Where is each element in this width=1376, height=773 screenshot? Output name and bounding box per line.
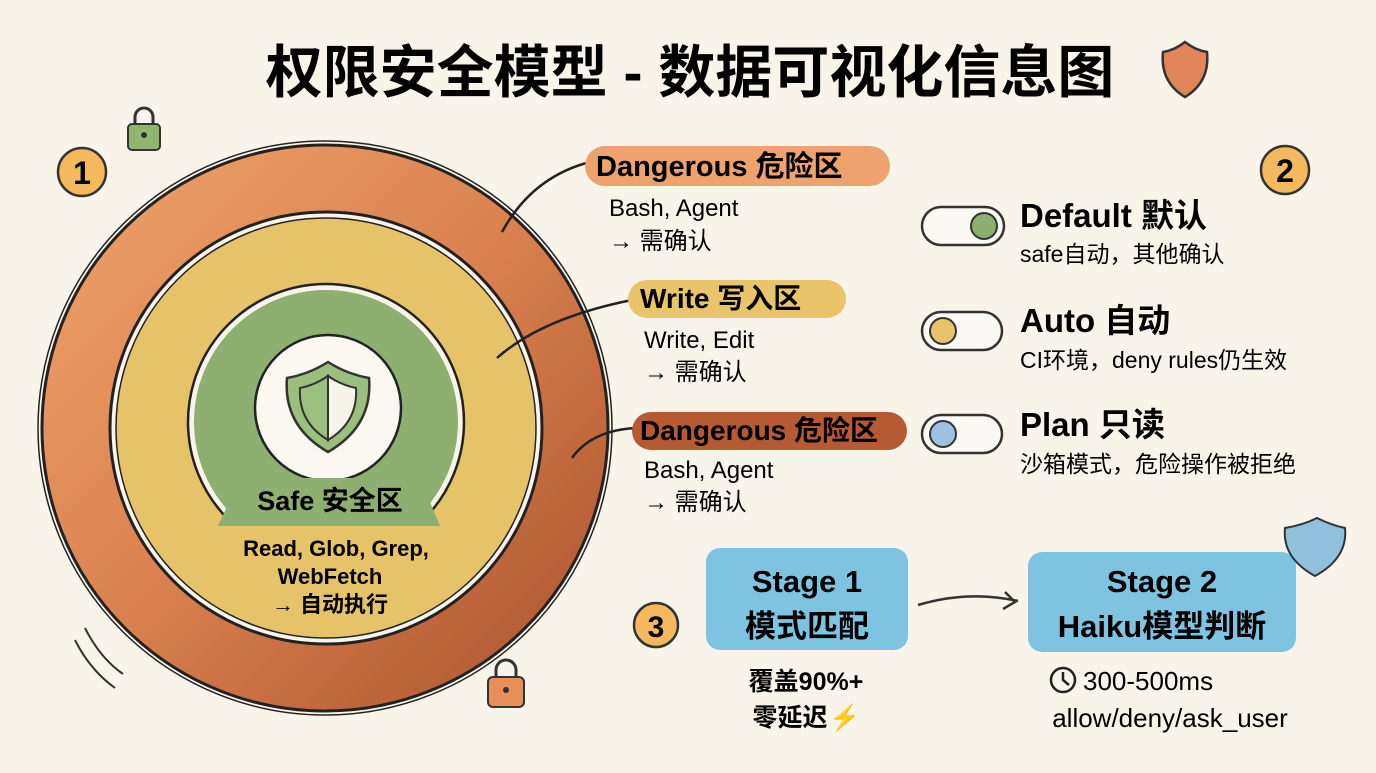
mode: plan: Plan 只读 — [1020, 406, 1165, 443]
mode: default: safe自动，其他确认 — [1020, 241, 1224, 267]
label: dangerous inner — [632, 412, 907, 516]
safe tools: → 自动执行 — [272, 592, 388, 617]
mode: auto: Auto 自动 — [1020, 302, 1170, 339]
stage 1 notes: 覆盖90%+ — [749, 668, 863, 696]
stage 1 box: Stage 1 — [752, 564, 862, 599]
badge 1 — [58, 148, 106, 196]
stage 2 box: Stage 2 — [1107, 564, 1217, 599]
label: dangerous inner: Dangerous 危险区 — [640, 415, 878, 446]
mode: plan: 沙箱模式，危险操作被拒绝 — [1020, 451, 1296, 477]
icon: green shield — [287, 362, 369, 452]
title: 权限安全模型 - 数据可视化信息图 — [266, 41, 1114, 105]
stage 1 notes: 零延迟 — [752, 704, 828, 732]
safe label: Safe 安全区 — [257, 486, 403, 516]
badge 1: 1 — [73, 155, 91, 191]
badge 2 — [1261, 146, 1309, 194]
icon: lock orange — [488, 660, 524, 707]
icon: blue shield — [1285, 518, 1345, 576]
label: dangerous outer: → 需确认 — [609, 228, 712, 255]
badge 2: 2 — [1276, 153, 1294, 189]
stage 2 notes: allow/deny/ask_user — [1052, 703, 1288, 733]
mode: auto — [922, 302, 1287, 373]
label: dangerous inner: → 需确认 — [644, 489, 747, 516]
stage 2 box: Haiku模型判断 — [1058, 609, 1266, 644]
stage 1 box — [706, 548, 908, 650]
label: dangerous inner: Bash, Agent — [644, 457, 774, 484]
label: dangerous outer — [585, 146, 890, 255]
safe tools — [243, 536, 429, 617]
motion lines — [75, 628, 123, 688]
label: dangerous outer: Dangerous 危险区 — [596, 150, 843, 183]
stage 2 box — [1028, 552, 1296, 652]
safe tools: Read, Glob, Grep, — [243, 536, 429, 561]
mode: default: Default 默认 — [1020, 197, 1207, 234]
label: write: Write 写入区 — [640, 283, 801, 314]
stage 1 notes: ⚡ — [829, 703, 861, 733]
stage 1 notes — [749, 668, 863, 733]
leader lines — [497, 162, 637, 458]
badge 3: 3 — [648, 611, 664, 644]
concentric rings chart — [38, 141, 612, 715]
icon: title shield — [1163, 42, 1207, 97]
stage 1 box: 模式匹配 — [745, 609, 869, 644]
stage 2 notes — [1051, 666, 1288, 733]
icon: lock green — [128, 108, 160, 150]
safe tools: WebFetch — [278, 564, 382, 589]
label: dangerous outer: Bash, Agent — [609, 195, 739, 222]
mode: auto: CI环境，deny rules仍生效 — [1020, 347, 1287, 373]
label: write: → 需确认 — [644, 359, 747, 386]
label: write: Write, Edit — [644, 327, 755, 354]
mode: default — [922, 197, 1224, 267]
label: write — [628, 280, 846, 386]
badge 3 — [634, 603, 678, 647]
arrow — [918, 592, 1018, 609]
mode: plan — [922, 406, 1296, 477]
stage 2 notes: 300-500ms — [1083, 666, 1213, 696]
